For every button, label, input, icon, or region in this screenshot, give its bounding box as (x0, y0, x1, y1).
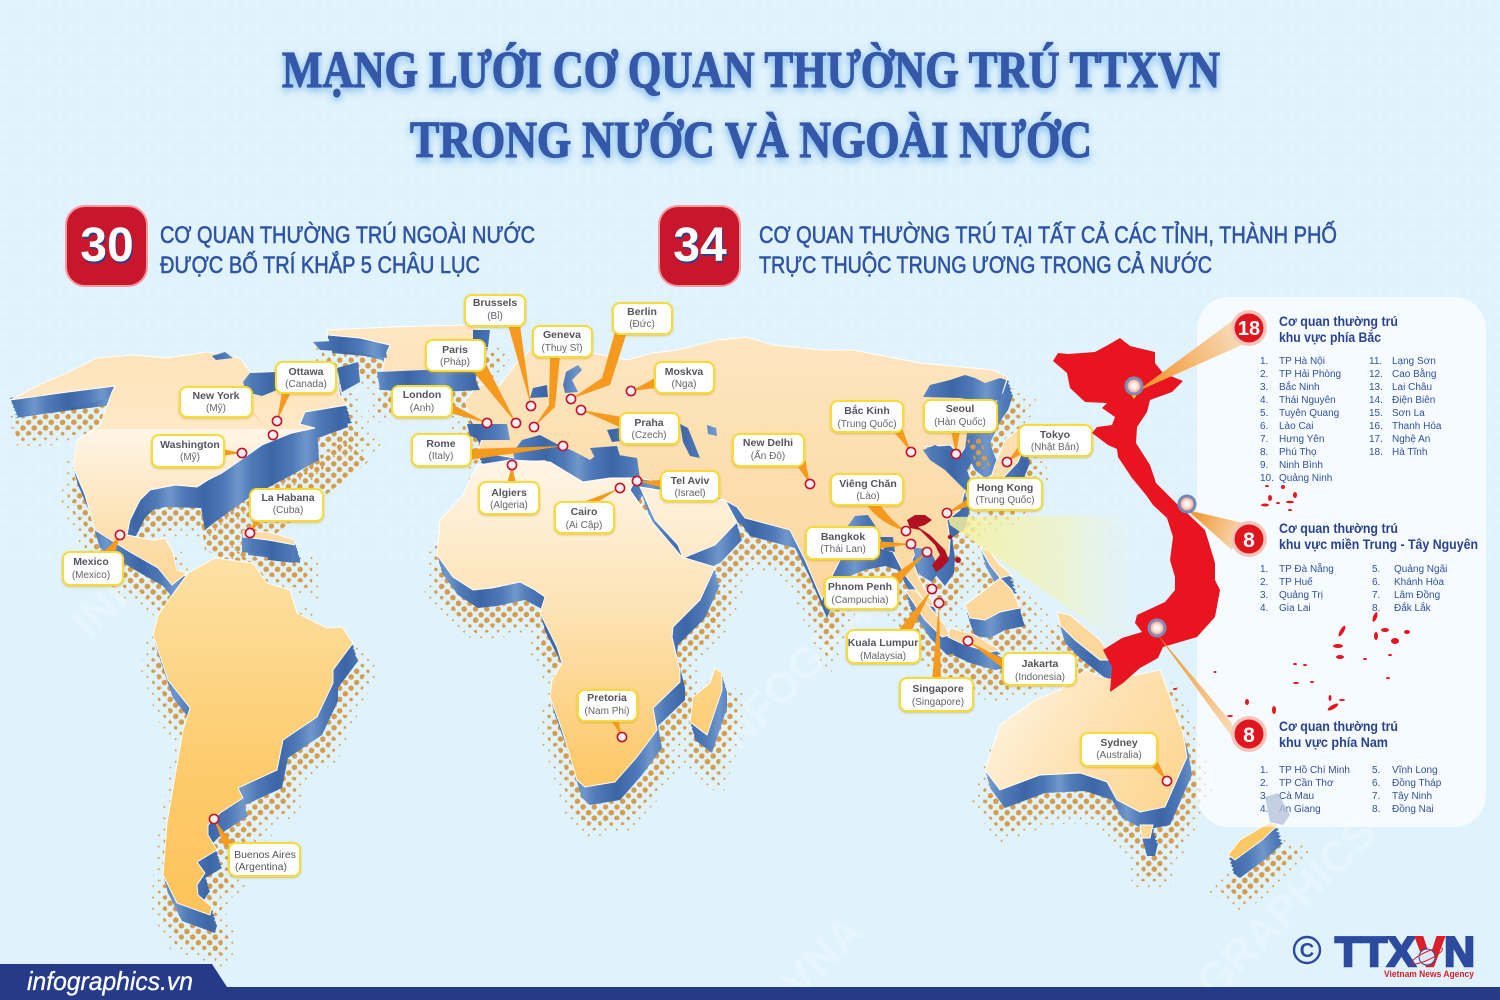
stat: 30 overseas bureaus (66, 206, 535, 286)
section: central bureaus: Cơ quan thường trú (1279, 520, 1398, 536)
Berlin (566, 303, 672, 404)
section: southern bureaus: 3. (1260, 791, 1268, 802)
Paris: (Pháp) (440, 357, 470, 368)
Paris (426, 340, 521, 428)
Algiers: (Algeria) (490, 500, 528, 511)
Berlin: Berlin (627, 306, 657, 318)
Viêng Chăn: (Lào) (856, 491, 880, 502)
section: northern bureaus: Hưng Yên (1279, 434, 1324, 445)
La Habana: La Habana (261, 492, 315, 504)
section: northern bureaus: khu vực phía Bắc (1279, 328, 1381, 345)
section: southern bureaus: 6. (1372, 778, 1380, 789)
Sydney: (Australia) (1096, 750, 1142, 761)
section: northern bureaus: Ninh Bình (1279, 460, 1323, 471)
title (282, 41, 1220, 169)
section: northern bureaus: 3. (1260, 382, 1268, 393)
section: central bureaus: khu vực miền Trung - Tây Nguyên (1279, 536, 1478, 552)
Cairo (555, 483, 625, 533)
Tokyo: Tokyo (1040, 429, 1070, 441)
New Delhi: New Delhi (743, 437, 793, 449)
Mexico: (Mexico) (72, 570, 110, 581)
section: southern bureaus: Cà Mau (1279, 791, 1314, 802)
Washington (152, 435, 247, 467)
section: northern bureaus: 6. (1260, 421, 1268, 432)
Bangkok: (Thái Lan) (820, 544, 866, 555)
section: central bureaus: 7. (1372, 590, 1380, 601)
section: southern bureaus: 1. (1260, 765, 1268, 776)
stat: 34 domestic bureaus: 34 (674, 221, 728, 274)
section: southern bureaus: khu vực phía Nam (1279, 734, 1388, 750)
beams from Vietnam to bureau counts (1136, 318, 1244, 748)
section: northern bureaus: 10. (1260, 473, 1274, 484)
stat: 34 domestic bureaus (659, 206, 1337, 286)
Sydney (1081, 733, 1172, 786)
background: INFO (62, 538, 171, 647)
stat: 34 domestic bureaus: TRỰC THUỘC TRUNG ƯƠNG TRONG CẢ NƯỚC (759, 250, 1212, 279)
section: northern bureaus: Điện Biên (1392, 395, 1435, 406)
section: central bureaus: Quảng Trị (1279, 590, 1323, 601)
section: central bureaus: TP Đà Nẵng (1279, 562, 1334, 575)
section: northern bureaus: Phú Thọ (1279, 447, 1317, 458)
section: central bureaus: Đắk Lắk (1394, 601, 1432, 614)
Viêng Chăn (831, 474, 911, 536)
section: central bureaus: 2. (1260, 577, 1268, 588)
stat: 30 overseas bureaus: CƠ QUAN THƯỜNG TRÚ NGOÀI NƯỚC (160, 222, 535, 249)
Tel Aviv (632, 471, 719, 501)
Moskva: (Nga) (671, 379, 697, 390)
section: northern bureaus: Lạng Sơn (1392, 356, 1436, 367)
section: northern bureaus: Hà Tĩnh (1392, 447, 1427, 458)
section: northern bureaus (1231, 310, 1442, 484)
section: northern bureaus: TP Hải Phòng (1279, 369, 1341, 380)
Tel Aviv: Tel Aviv (671, 475, 710, 487)
section: southern bureaus: TP Hồ Chí Minh (1279, 764, 1350, 776)
section: central bureaus: 1. (1260, 564, 1268, 575)
Pretoria: Pretoria (587, 692, 627, 704)
section: northern bureaus: Thanh Hóa (1392, 421, 1442, 432)
Kuala Lumpur (847, 584, 937, 663)
Tokyo: (Nhật Bản) (1031, 442, 1079, 453)
Mexico: Mexico (73, 556, 109, 568)
section: central bureaus: Gia Lai (1279, 603, 1311, 614)
Tokyo (1002, 425, 1092, 467)
Rome: (Italy) (428, 451, 454, 462)
Brussels: (Bỉ) (487, 310, 503, 322)
Sydney: Sydney (1100, 737, 1138, 749)
background: INFOGRAPHICS (702, 494, 976, 767)
section: northern bureaus: 18. (1369, 447, 1383, 458)
Geneva: Geneva (543, 329, 581, 341)
section: northern bureaus: 13. (1369, 382, 1383, 393)
logo: TTXVN (1294, 928, 1475, 980)
Hong Kong (942, 478, 1042, 518)
London: London (403, 389, 441, 401)
Hong Kong: (Trung Quốc) (975, 494, 1035, 506)
section: central bureaus: 5. (1372, 564, 1380, 575)
stat: 30 overseas bureaus: ĐƯỢC BỐ TRÍ KHẮP 5 CHÂU LỤC (160, 251, 480, 279)
Pretoria (578, 690, 637, 742)
New York: (Mỹ) (206, 403, 226, 414)
title: MẠNG LƯỚI CƠ QUAN THƯỜNG TRÚ TTXVN (282, 41, 1220, 99)
Brussels (465, 295, 536, 411)
Phnom Penh: (Campuchia) (831, 595, 889, 606)
panel: domestic bureau lists (1197, 297, 1486, 827)
Berlin: (Đức) (629, 319, 655, 330)
La Habana: (Cuba) (273, 505, 303, 516)
section: northern bureaus: 12. (1369, 369, 1383, 380)
section: northern bureaus: Nghệ An (1392, 434, 1430, 445)
section: northern bureaus: 8. (1260, 447, 1268, 458)
Geneva (529, 326, 592, 432)
Bangkok (806, 527, 916, 559)
Bắc Kinh: Bắc Kinh (844, 404, 890, 417)
section: northern bureaus: Cơ quan thường trú (1279, 313, 1398, 329)
section: southern bureaus: Vĩnh Long (1392, 765, 1438, 776)
Singapore (900, 598, 973, 711)
Pretoria: (Nam Phi) (584, 706, 630, 717)
section: southern bureaus: 2. (1260, 778, 1268, 789)
Praha (576, 405, 679, 444)
section: northern bureaus: Quảng Ninh (1279, 473, 1332, 484)
section: southern bureaus: An Giang (1279, 804, 1321, 815)
Algiers: Algiers (491, 487, 527, 499)
section: northern bureaus: 9. (1260, 460, 1268, 471)
inland seas (212, 330, 1006, 582)
Seoul: (Hàn Quốc) (934, 416, 986, 428)
logo: TTXVN: Vietnam News Agency (1384, 969, 1475, 980)
Jakarta: (Indonesia) (1015, 672, 1065, 683)
large Vietnam map (1053, 338, 1220, 692)
section: southern bureaus: Đồng Nai (1392, 803, 1434, 815)
Phnom Penh (825, 547, 932, 609)
highlight beam from small Vietnam to large map (948, 515, 1135, 655)
Ottawa: Ottawa (288, 366, 324, 378)
section: northern bureaus: 11. (1369, 356, 1382, 367)
section: central bureaus: 8 (1243, 529, 1255, 552)
section: central bureaus (1231, 520, 1478, 614)
section: southern bureaus (1231, 716, 1442, 815)
Algiers (479, 460, 539, 514)
section: southern bureaus: Tây Ninh (1392, 791, 1432, 802)
section: central bureaus: 8. (1372, 603, 1380, 614)
New Delhi: (Ấn Độ) (751, 449, 785, 462)
section: northern bureaus: 15. (1369, 408, 1383, 419)
Seoul (924, 400, 997, 459)
section: central bureaus: TP Huế (1279, 576, 1313, 588)
Washington: (Mỹ) (180, 452, 200, 463)
thick coastal folds (10, 384, 348, 563)
section: central bureaus: 4. (1260, 603, 1268, 614)
London: (Anh) (410, 403, 434, 414)
Bắc Kinh (831, 401, 916, 457)
New York: New York (193, 390, 240, 402)
Rome (412, 434, 568, 466)
New Delhi (733, 434, 815, 489)
callouts: cities (63, 295, 1172, 876)
section: southern bureaus: 8. (1372, 804, 1380, 815)
Buenos Aires: Buenos Aires (234, 849, 296, 861)
section: central bureaus: 6. (1372, 577, 1380, 588)
Tel Aviv: (Israel) (674, 488, 706, 499)
section: northern bureaus: 7. (1260, 434, 1268, 445)
section: northern bureaus: 16. (1369, 421, 1383, 432)
Ottawa: (Canada) (285, 379, 327, 390)
Singapore: Singapore (912, 683, 964, 695)
section: northern bureaus: Thái Nguyên (1279, 395, 1336, 406)
section: central bureaus: Khánh Hòa (1394, 577, 1444, 588)
title: TRONG NƯỚC VÀ NGOÀI NƯỚC (410, 111, 1092, 169)
section: central bureaus: 3. (1260, 590, 1268, 601)
section: southern bureaus: 8 (1243, 724, 1255, 747)
section: northern bureaus: 14. (1369, 395, 1383, 406)
Moskva (626, 362, 714, 396)
Praha: Praha (634, 417, 664, 429)
Paris: Paris (442, 344, 468, 356)
Seoul: Seoul (946, 403, 974, 415)
world map (10, 325, 1284, 947)
footer bar: infographics.vn (27, 966, 193, 996)
section: northern bureaus: Lai Châu (1392, 382, 1432, 393)
section: northern bureaus: Lào Cai (1279, 421, 1313, 432)
logo: TTXVN: C (1300, 940, 1314, 962)
Kuala Lumpur: Kuala Lumpur (848, 637, 918, 649)
section: northern bureaus: 17. (1369, 434, 1383, 445)
section: southern bureaus: Đồng Tháp (1392, 777, 1442, 789)
Singapore: (Singapore) (912, 697, 964, 708)
map pins on Vietnam (1124, 376, 1196, 638)
offshore islands (1173, 485, 1410, 717)
footer bar (0, 964, 1500, 1000)
London (392, 386, 492, 428)
small Vietnam on world map (907, 515, 961, 572)
section: northern bureaus: Tuyên Quang (1279, 408, 1339, 419)
Bangkok: Bangkok (821, 531, 865, 543)
section: central bureaus: Quảng Ngãi (1394, 564, 1447, 575)
section: central bureaus: Lâm Đồng (1394, 589, 1440, 601)
Washington: Washington (160, 439, 220, 451)
Brussels: Brussels (473, 297, 517, 309)
stat: 30 overseas bureaus: 30 (81, 221, 135, 274)
New Zealand north island under panel (1265, 793, 1290, 825)
section: northern bureaus: 4. (1260, 395, 1268, 406)
section: southern bureaus: 5. (1372, 765, 1380, 776)
Viêng Chăn: Viêng Chăn (839, 478, 897, 490)
section: southern bureaus: 4. (1260, 804, 1268, 815)
section: northern bureaus: 18 (1238, 318, 1260, 340)
Kuala Lumpur: (Malaysia) (860, 651, 906, 662)
section: northern bureaus: 2. (1260, 369, 1268, 380)
Jakarta (963, 636, 1076, 685)
Phnom Penh: Phnom Penh (828, 581, 892, 593)
stat: 34 domestic bureaus: 34 (673, 219, 727, 272)
section: northern bureaus: Cao Bằng (1392, 367, 1436, 380)
La Habana (245, 489, 323, 538)
Rome: Rome (426, 438, 456, 450)
Ottawa (272, 362, 336, 426)
Bắc Kinh: (Trung Quốc) (837, 418, 897, 430)
section: southern bureaus: Cơ quan thường trú (1279, 718, 1398, 734)
section: southern bureaus: 7. (1372, 791, 1380, 802)
section: northern bureaus: 5. (1260, 408, 1268, 419)
Buenos Aires: (Argentina) (235, 861, 287, 873)
stat: 34 domestic bureaus: CƠ QUAN THƯỜNG TRÚ TẠI TẤT CẢ CÁC TỈNH, THÀNH PHỐ (759, 220, 1337, 249)
section: northern bureaus: TP Hà Nội (1279, 356, 1325, 367)
Jakarta: Jakarta (1022, 658, 1059, 670)
Mexico (63, 530, 125, 585)
New York (180, 387, 278, 440)
stat: 30 overseas bureaus: 30 (80, 219, 134, 272)
Moskva: Moskva (665, 366, 703, 378)
section: southern bureaus: TP Cần Thơ (1279, 777, 1334, 789)
section: northern bureaus: Sơn La (1392, 408, 1425, 419)
section: northern bureaus: 1. (1260, 356, 1268, 367)
Hong Kong: Hong Kong (977, 482, 1033, 494)
logo: TTXVN: TTXVN (1335, 928, 1475, 975)
Cairo: Cairo (571, 506, 597, 518)
Praha: (Czech) (631, 430, 667, 441)
Cairo: (Ai Cập) (566, 520, 602, 531)
section: northern bureaus: Bắc Ninh (1279, 380, 1320, 393)
Buenos Aires (209, 814, 300, 876)
Geneva: (Thuỵ Sĩ) (541, 343, 583, 354)
